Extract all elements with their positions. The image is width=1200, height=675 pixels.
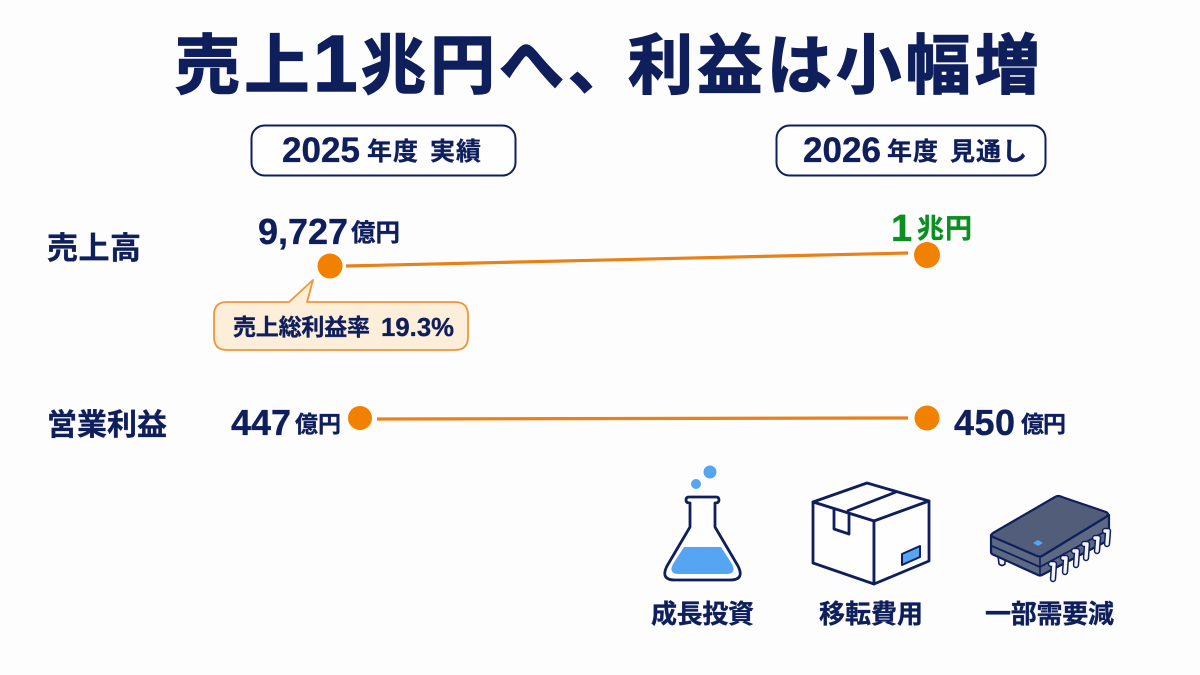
operating profit line chart — [348, 406, 940, 430]
caption: relocation costs: 移転費用 — [819, 594, 923, 631]
operating profit value 2025: 億円 — [295, 405, 341, 439]
title: 売上 — [175, 13, 314, 107]
caption: partial demand decline: 一部需要減 — [985, 594, 1114, 631]
operating profit value 2026 — [954, 402, 1066, 443]
icon: flask — [665, 466, 740, 580]
sales value 2026: 兆円 — [917, 207, 972, 246]
pill: 2025 actual: 実績 — [430, 132, 481, 168]
caption: growth investment: 成長投資 — [651, 594, 754, 631]
pill: 2026 forecast: 年度 — [887, 132, 938, 168]
pill: 2026 forecast: 2026 — [803, 131, 881, 170]
title: 利益は小幅増 — [628, 13, 1044, 107]
icon: microchip — [991, 496, 1109, 579]
sales line chart — [318, 242, 940, 278]
operating profit value 2025 — [231, 402, 341, 443]
callout: gross margin: 売上総利益率 — [233, 308, 370, 342]
pill: 2026 forecast: 見通し — [950, 132, 1027, 168]
pill: 2026 forecast — [776, 126, 1046, 176]
operating profit value 2026: 450 — [954, 402, 1015, 443]
sales value 2025: 億円 — [351, 214, 400, 249]
row label: operating profit: 営業利益 — [47, 400, 167, 444]
callout: gross margin: 19.3% — [381, 314, 454, 342]
sales value 2026 — [891, 207, 972, 250]
sales value 2026: 1 — [891, 208, 912, 250]
title — [175, 13, 1044, 108]
icon: cardboard box — [813, 483, 929, 584]
chip pins — [1051, 531, 1108, 579]
sales value 2025 — [258, 211, 400, 252]
sales value 2025: 9,727 — [258, 211, 348, 252]
pill: 2025 actual: 2025 — [282, 131, 360, 170]
operating profit value 2025: 447 — [231, 402, 291, 443]
title: 兆円へ、 — [361, 13, 637, 107]
row label: sales: 売上高 — [47, 223, 141, 268]
pill: 2025 actual: 年度 — [367, 132, 418, 168]
pill: 2025 actual — [252, 126, 516, 176]
callout: gross margin — [214, 280, 468, 350]
title: 1 — [313, 19, 358, 108]
operating profit value 2026: 億円 — [1021, 405, 1066, 439]
